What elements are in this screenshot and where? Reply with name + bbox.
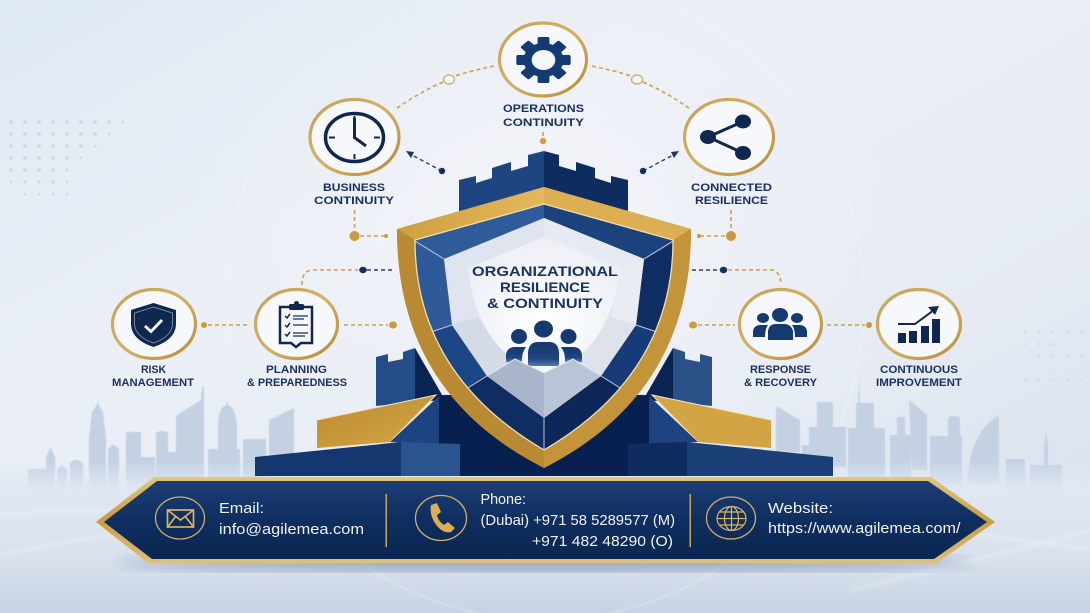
- label: RESPONSE: [750, 364, 811, 376]
- node: risk management: [112, 290, 196, 389]
- shield inner line: [415, 204, 673, 450]
- label: [876, 364, 962, 389]
- phone contact: [416, 492, 675, 550]
- label: RESILIENCE: [695, 195, 768, 207]
- skyline: left: [28, 387, 294, 489]
- phone contact: +971 482 48290 (O): [532, 534, 673, 550]
- shield title: RESILIENCE: [500, 279, 590, 295]
- label: [247, 364, 347, 389]
- label: OPERATIONS: [503, 103, 584, 115]
- shield title: ORGANIZATIONAL: [472, 263, 619, 279]
- shield title: [472, 263, 619, 311]
- website contact: Website:: [768, 501, 833, 517]
- label: [691, 182, 772, 207]
- shield pale facets: [444, 218, 644, 418]
- castle: lower fortress: [255, 348, 833, 476]
- skyline: right: [776, 375, 1062, 490]
- node: operations continuity: [500, 23, 586, 129]
- label: BUSINESS: [323, 182, 385, 194]
- node: response and recovery: [740, 290, 822, 389]
- label: [744, 364, 818, 389]
- shield title: & CONTINUITY: [487, 295, 604, 311]
- label: CONTINUOUS: [880, 364, 958, 376]
- shield gold rim: [397, 187, 691, 468]
- label: [503, 103, 585, 129]
- icon: share network: [700, 114, 751, 160]
- label: MANAGEMENT: [112, 377, 194, 389]
- icon: clipboard: [280, 301, 312, 347]
- website contact: [706, 497, 962, 539]
- icon: envelope: [168, 510, 194, 527]
- phone contact: (Dubai) +971 58 5289577 (M): [480, 513, 675, 529]
- label: IMPROVEMENT: [876, 377, 962, 389]
- people icon: [506, 320, 582, 366]
- shield blue band: [416, 204, 672, 450]
- label: [314, 182, 395, 207]
- email contact: Email:: [219, 501, 264, 517]
- website contact: https://www.agilemea.com/: [768, 521, 962, 537]
- dot pattern: top left: [9, 120, 124, 196]
- icon: shield check: [131, 303, 176, 347]
- label: CONTINUITY: [314, 195, 395, 207]
- label: [112, 364, 194, 389]
- phone contact: Phone:: [480, 492, 526, 508]
- label: CONNECTED: [691, 182, 772, 194]
- icon: handset: [431, 503, 455, 532]
- icon: gear: [516, 37, 571, 83]
- icon: clock: [326, 114, 384, 162]
- label: & PREPAREDNESS: [247, 377, 347, 389]
- node: continuous improvement: [876, 290, 962, 389]
- label: PLANNING: [266, 364, 327, 376]
- shield lower facets: [487, 359, 601, 418]
- label: CONTINUITY: [503, 117, 585, 129]
- shield: [397, 187, 691, 468]
- node: planning and preparedness: [247, 290, 347, 389]
- label: RISK: [141, 364, 166, 376]
- email contact: info@agilemea.com: [219, 522, 364, 538]
- connectors: [201, 66, 872, 328]
- contact banner: [96, 477, 995, 571]
- icon: growth chart: [898, 306, 940, 343]
- dot pattern: right: [1024, 330, 1084, 381]
- email contact: [156, 497, 364, 539]
- node: business continuity: [310, 100, 399, 207]
- skyline fade: [0, 460, 1090, 490]
- icon: globe: [717, 506, 746, 530]
- node: connected resilience: [684, 100, 774, 207]
- divider: [690, 494, 691, 547]
- divider: [386, 494, 387, 547]
- castle: top tower: [459, 151, 628, 212]
- label: & RECOVERY: [744, 377, 818, 389]
- icon: team: [753, 308, 807, 340]
